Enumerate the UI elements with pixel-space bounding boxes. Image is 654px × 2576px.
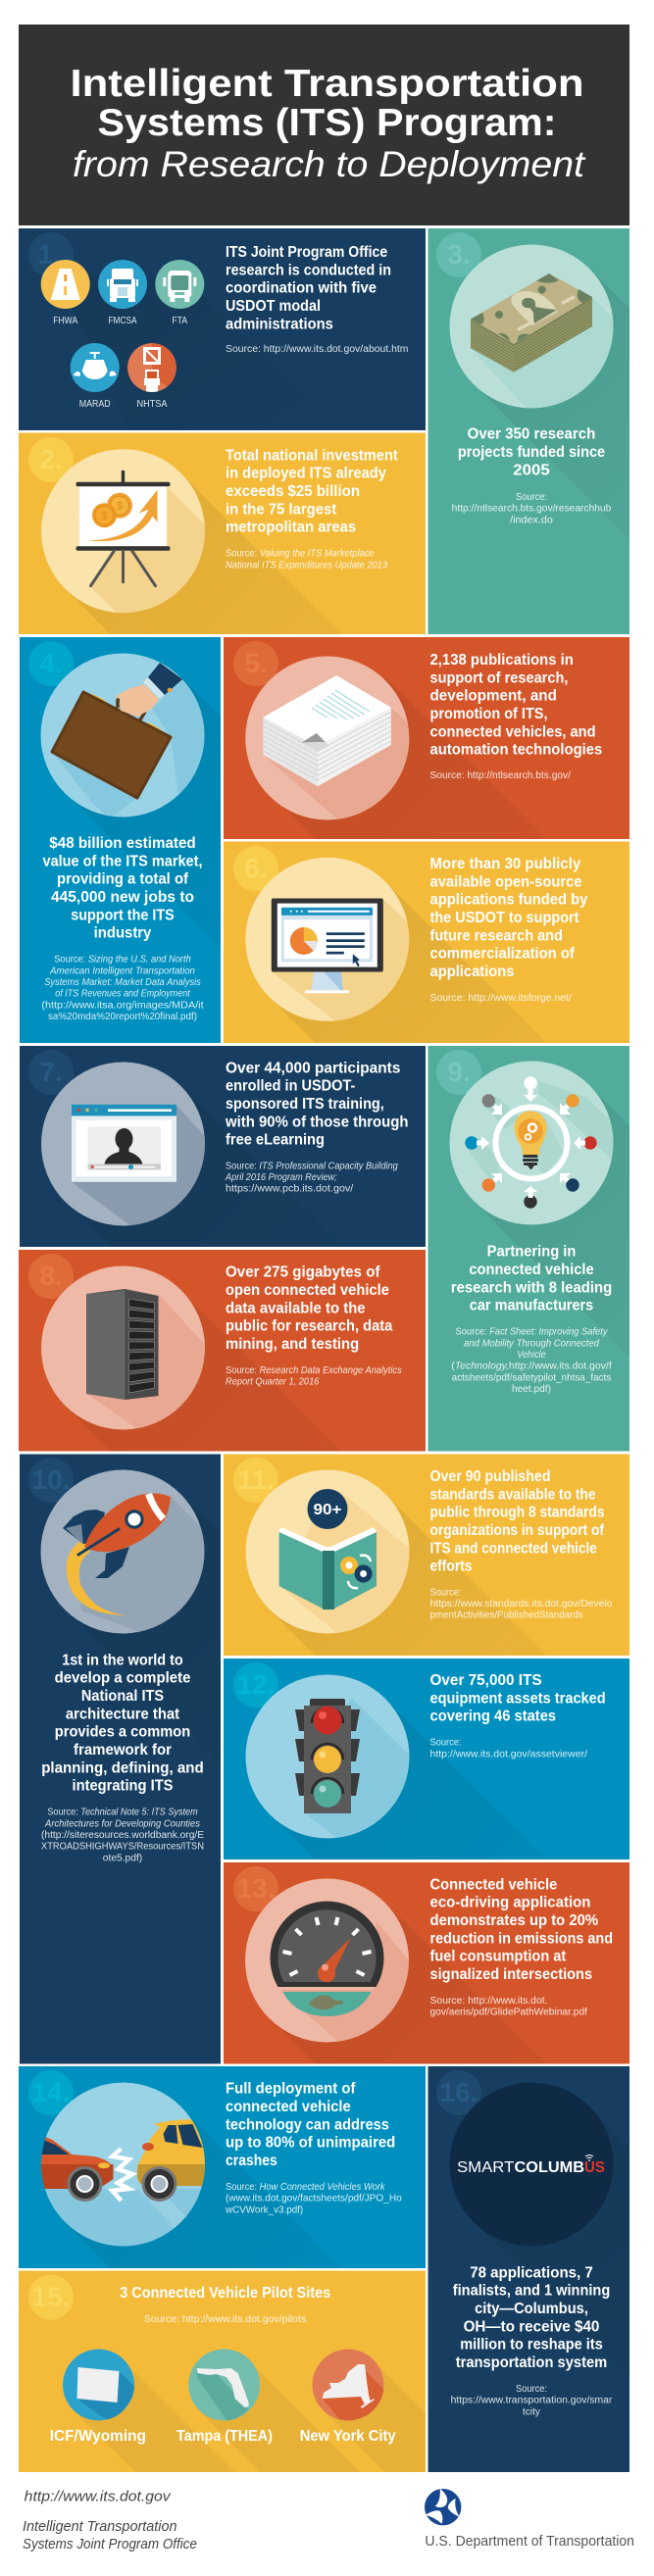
source 10 <box>41 1808 204 1863</box>
source 9: Vehicle <box>517 1350 546 1361</box>
source 15: Source: http://www.its.dot.gov/pilots <box>144 2314 306 2325</box>
heading 11: public through 8 standards <box>429 1505 605 1521</box>
heading 4: industry <box>94 925 151 941</box>
number badge 2: 2. <box>39 444 63 474</box>
number badge 7 <box>28 1050 74 1095</box>
heading 5: automation technologies <box>429 742 602 759</box>
heading 2: Total national investment <box>226 447 398 464</box>
number badge 5 <box>233 641 278 686</box>
source 14: Source: How Connected Vehicles Work <box>226 2182 386 2193</box>
panel 11: published standards <box>224 1455 629 1656</box>
heading 1 <box>226 244 391 332</box>
agency labels <box>53 315 187 410</box>
yellow car <box>137 2119 212 2186</box>
heading 10: integrating ITS <box>73 1778 174 1795</box>
number badge 9 <box>436 1050 481 1095</box>
heading 4: $48 billion estimated <box>49 835 196 852</box>
heading 2 <box>226 447 398 536</box>
source 10: Architectures for Developing Counties <box>44 1818 200 1829</box>
panel 12: equipment assets <box>224 1659 629 1859</box>
heading 13: demonstrates up to 20% <box>429 1912 598 1929</box>
heading 4: support the ITS <box>71 908 175 923</box>
heading 9 <box>451 1244 612 1314</box>
title: Systems (ITS) Program: <box>98 102 557 144</box>
source 4: American Intelligent Transportation <box>49 966 195 976</box>
site labels: Tampa (THEA) <box>176 2428 273 2445</box>
heading 6: More than 30 publicly <box>429 856 580 872</box>
source 8 <box>226 1365 402 1388</box>
source 14 <box>225 2182 402 2215</box>
source 7 <box>225 1161 398 1195</box>
heading 10: National ITS <box>81 1688 164 1705</box>
icon: Florida <box>188 2349 260 2424</box>
title: from Research to Deployment <box>73 144 586 184</box>
number badge 13 <box>233 1866 278 1911</box>
icon: Smart Columbus logo: COLUMB <box>514 2159 584 2176</box>
source 3: Source: <box>516 492 547 503</box>
source 10: Source: Technical Note 5: ITS System <box>47 1808 198 1818</box>
panel 8: open data <box>19 1250 426 1451</box>
heading 1: coordination with five <box>226 280 377 297</box>
icon: e-learning window <box>41 1063 205 1225</box>
panel 4: market value <box>20 637 221 1043</box>
source 10: (http://siteresources.worldbank.org/E <box>41 1830 204 1841</box>
source 2: Source: Valuing the ITS Marketplace <box>226 549 375 560</box>
number badge 3: 3. <box>447 239 471 270</box>
heading 11: standards available to the <box>429 1486 596 1503</box>
heading 10: planning, defining, and <box>41 1759 204 1776</box>
heading 14: up to 80% of unimpaired <box>226 2135 395 2152</box>
heading 7: Over 44,000 participants <box>226 1060 400 1076</box>
heading 6: applications funded by <box>429 892 587 909</box>
source 7: Source: ITS Professional Capacity Building <box>226 1161 398 1171</box>
heading 7: sponsored ITS training, <box>226 1096 384 1113</box>
source 2 <box>226 549 388 570</box>
heading 7: with 90% of those through <box>225 1114 408 1130</box>
footer: website and office: http://www.its.dot.gov <box>25 2489 172 2505</box>
site labels: New York City <box>300 2428 396 2445</box>
number badge 12 <box>233 1662 278 1708</box>
heading 9: Partnering in <box>487 1244 576 1261</box>
heading 6: future research and <box>429 927 563 944</box>
heading 12 <box>429 1672 606 1725</box>
source 11: pmentActivities/PublishedStandards <box>429 1610 583 1621</box>
heading 5: 2,138 publications in <box>429 652 574 669</box>
icon: presentation easel: $ <box>101 511 108 522</box>
panel 1: modal administrations <box>19 228 426 444</box>
icon: traffic light <box>245 1674 410 1839</box>
source 1: Source: http://www.its.dot.gov/about.htm <box>226 344 408 355</box>
heading 16: finalists, and 1 winning <box>453 2283 610 2300</box>
source 10: ote5.pdf) <box>103 1853 142 1863</box>
number badge 8 <box>28 1254 74 1299</box>
panel 3: research projects <box>428 228 629 634</box>
source 4: Source: Sizing the U.S. and North <box>54 955 191 966</box>
heading 4: value of the ITS market, <box>43 853 202 870</box>
panel 10: national architecture <box>20 1455 221 2064</box>
source 9 <box>451 1327 612 1395</box>
panel 9: car manufacturers <box>428 1046 629 1451</box>
icon: briefcase <box>41 653 211 818</box>
source 9: heet.pdf) <box>512 1384 551 1395</box>
heading 7 <box>225 1060 408 1149</box>
footer: website and office <box>23 2489 197 2552</box>
number badge 14 <box>28 2070 74 2115</box>
icon: car crash <box>41 2082 212 2248</box>
source 11: Source: <box>429 1587 461 1598</box>
source 4: Systems Market: Market Data Analysis <box>44 977 201 988</box>
heading 14: connected vehicle <box>226 2099 351 2115</box>
icon: speedometer <box>245 1878 409 2043</box>
heading 14 <box>226 2081 395 2169</box>
heading 16: OH—to receive $40 <box>464 2318 599 2335</box>
heading 11: organizations in support of <box>429 1522 605 1539</box>
number badge 6 <box>233 846 278 891</box>
source 4: of ITS Revenues and Employment <box>55 989 191 1000</box>
heading 14: Full deployment of <box>226 2081 356 2098</box>
icon: stack of papers <box>245 657 410 819</box>
number badge 15: 15. <box>32 2282 70 2311</box>
number badge 4 <box>28 641 74 686</box>
number badge 10 <box>28 1458 74 1503</box>
number badge 1: 1. <box>37 239 61 270</box>
heading 16: million to reshape its <box>460 2337 603 2353</box>
number badge 16 <box>436 2070 481 2115</box>
icon: New York <box>312 2349 387 2424</box>
source 11: https://www.standards.its.dot.gov/Develo <box>429 1599 613 1610</box>
heading 7: enrolled in USDOT- <box>226 1078 355 1095</box>
heading 12: Over 75,000 ITS <box>429 1672 542 1689</box>
heading 13 <box>429 1876 613 1983</box>
source 13: Source: http://www.its.dot. <box>429 1996 547 2006</box>
heading 15: 3 Connected Vehicle Pilot Sites <box>120 2285 330 2302</box>
source 16: https://www.transportation.gov/smar <box>451 2396 613 2406</box>
source 14: wCVWork_v3.pdf) <box>225 2204 303 2215</box>
heading 6: available open-source <box>429 873 582 890</box>
heading 10: architecture that <box>66 1706 180 1722</box>
source 7: https://www.pcb.its.dot.gov/ <box>226 1184 354 1195</box>
heading 8: open connected vehicle <box>226 1282 389 1299</box>
number badge 15 <box>28 2274 74 2319</box>
source 13 <box>429 1996 587 2018</box>
heading 9: car manufacturers <box>470 1298 593 1314</box>
heading 4: 445,000 new jobs to <box>51 889 194 906</box>
icon: standards book <box>245 1470 410 1633</box>
heading 16: city—Columbus, <box>475 2301 588 2317</box>
heading 16: 78 applications, 7 <box>470 2264 593 2281</box>
agency labels: FTA <box>173 315 187 326</box>
number badge 7: 7. <box>39 1057 63 1087</box>
panel 14: crash reduction <box>19 2066 426 2268</box>
number badge 11 <box>233 1458 278 1503</box>
heading 1: USDOT modal <box>226 298 321 315</box>
number badge 10: 10. <box>32 1464 70 1495</box>
panel 7: training <box>20 1046 426 1247</box>
heading 1: research is conducted in <box>226 262 391 278</box>
number badge 6: 6. <box>244 853 268 883</box>
heading 11: Over 90 published <box>429 1468 551 1485</box>
heading 13: reduction in emissions and <box>429 1930 613 1947</box>
heading 13: Connected vehicle <box>429 1876 557 1893</box>
panel 15: pilot sites <box>19 2270 426 2472</box>
number badge 13: 13. <box>237 1873 275 1904</box>
heading 2: exceeds $25 billion <box>226 483 360 500</box>
source 16 <box>451 2384 613 2417</box>
heading 6: applications <box>429 964 515 980</box>
source 12: Source: <box>429 1738 461 1749</box>
icon: Smart Columbus logo: SMART <box>457 2159 515 2176</box>
source 3: http://ntlsearch.bts.gov/researchhub <box>452 504 612 515</box>
source 14: (www.its.dot.gov/factsheets/pdf/JPO_Ho <box>226 2194 402 2204</box>
number badge 1 <box>28 232 74 277</box>
number badge 8: 8. <box>39 1261 63 1291</box>
footer: website and office: Intelligent Transportation <box>23 2518 176 2535</box>
heading 2: metropolitan areas <box>226 520 356 536</box>
number badge 3 <box>436 232 481 277</box>
number badge 9: 9. <box>447 1057 471 1087</box>
heading 2: in deployed ITS already <box>226 466 386 482</box>
heading 2: in the 75 largest <box>226 501 337 518</box>
heading 1: ITS Joint Program Office <box>226 244 387 261</box>
heading 13: eco-driving application <box>429 1895 590 1911</box>
source 16: tcity <box>523 2406 540 2417</box>
source 8: Source: Research Data Exchange Analytics <box>226 1365 402 1376</box>
heading 6 <box>429 856 587 980</box>
icon: server rack <box>41 1266 205 1429</box>
heading 10: provides a common <box>55 1724 190 1741</box>
heading 7: free eLearning <box>226 1132 325 1149</box>
source 5: Source: http://ntlsearch.bts.gov/ <box>429 770 571 781</box>
heading 14: technology can address <box>226 2116 389 2133</box>
icon: stack of money <box>449 245 614 408</box>
footer: website and office: Systems Joint Program Office <box>23 2536 197 2552</box>
heading 16 <box>453 2264 610 2371</box>
source 4: sa%20mda%20report%20final.pdf) <box>48 1012 197 1022</box>
exhaust <box>67 1539 127 1615</box>
agency labels: MARAD <box>79 398 111 410</box>
number badge 14: 14. <box>32 2077 70 2107</box>
number badge 5: 5. <box>244 648 268 678</box>
heading 3 <box>458 425 605 478</box>
icon: standards book: 90+ <box>313 1502 342 1518</box>
heading 13: signalized intersections <box>429 1966 592 1983</box>
heading 8: Over 275 gigabytes of <box>226 1264 380 1281</box>
heading 5: development, and <box>429 688 557 705</box>
source 13: gov/aeris/pdf/GlidePathWebinar.pdf <box>429 2007 587 2018</box>
icon: Smart Columbus logo <box>449 2082 614 2247</box>
arrows <box>477 1088 585 1198</box>
number badge 2 <box>28 437 74 482</box>
heading 11: efforts <box>429 1559 473 1575</box>
heading 5: support of research, <box>429 669 568 686</box>
heading 11 <box>429 1468 605 1575</box>
heading 4 <box>43 835 202 941</box>
heading 6: the USDOT to support <box>429 910 579 926</box>
heading 3: 2005 <box>513 462 550 478</box>
source 9: (Technology, http://www.its.dot.gov/f <box>451 1362 612 1372</box>
red car <box>41 2135 114 2189</box>
source 11 <box>429 1587 613 1621</box>
heading 8: public for research, data <box>226 1318 392 1335</box>
agency labels: FHWA <box>53 315 77 326</box>
icon: Wyoming <box>63 2349 137 2424</box>
heading 16: transportation system <box>456 2354 607 2371</box>
heading 9: connected vehicle <box>469 1262 594 1278</box>
heading 10: 1st in the world to <box>62 1652 183 1668</box>
title: Intelligent Transportation <box>71 63 584 105</box>
heading 5: connected vehicles, and <box>429 723 596 740</box>
icon: FHWA road <box>41 260 90 309</box>
site labels: ICF/Wyoming <box>50 2428 146 2445</box>
number badge 4: 4. <box>39 648 63 678</box>
icon: rocket <box>41 1470 206 1640</box>
heading 5: promotion of ITS, <box>429 706 547 722</box>
panel 16: Smart Columbus <box>428 2066 654 2516</box>
source 9: actsheets/pdf/safetypilot_nhtsa_facts <box>452 1372 611 1383</box>
number badge 12: 12. <box>237 1669 275 1700</box>
icon: computer monitor <box>245 857 410 1021</box>
heading 1: administrations <box>226 316 333 332</box>
source 6: Source: http://www.itsforge.net/ <box>429 993 572 1004</box>
panel 13: eco-driving <box>224 1862 629 2064</box>
heading 14: crashes <box>226 2153 277 2169</box>
site labels <box>50 2428 396 2445</box>
source 3 <box>452 492 612 525</box>
partner dots <box>465 1076 597 1209</box>
icon: MARAD ship <box>71 343 120 392</box>
source 12 <box>429 1738 587 1759</box>
panel 5: publications <box>224 637 629 839</box>
title <box>19 25 629 225</box>
agency labels: NHTSA <box>137 398 167 410</box>
source 7: April 2016 Program Review; <box>225 1172 337 1183</box>
icon: presentation easel: $ <box>117 501 123 513</box>
source 10: XTROADSHIGHWAYS/Resources/ITSN <box>41 1842 204 1853</box>
heading 3: projects funded since <box>458 444 605 461</box>
number badge 16: 16. <box>440 2077 478 2107</box>
icon: FTA bus <box>155 260 204 309</box>
agency labels: FMCSA <box>108 315 137 326</box>
icon: Smart Columbus logo: US <box>584 2159 605 2176</box>
heading 10: develop a complete <box>55 1670 190 1687</box>
heading 13: fuel consumption at <box>429 1949 567 1965</box>
icon: FMCSA truck <box>98 260 147 309</box>
icon: light bulb with partners <box>449 1061 615 1225</box>
number badge 11: 11. <box>237 1464 275 1495</box>
footer: DOT logo <box>425 2489 461 2525</box>
icon: NHTSA seat belt <box>127 343 176 392</box>
heading 8: mining, and testing <box>226 1336 359 1353</box>
heading 10 <box>41 1652 204 1795</box>
source 9: and Mobility Through Connected <box>464 1338 599 1349</box>
footer: department name: U.S. Department of Transportation <box>425 2533 634 2550</box>
heading 8 <box>226 1264 392 1353</box>
source 16: Source: <box>516 2384 547 2395</box>
heading 5 <box>429 652 602 759</box>
heading 8: data available to the <box>226 1300 366 1316</box>
panel 6: open-source applications <box>224 841 629 1043</box>
source 12: http://www.its.dot.gov/assetviewer/ <box>429 1749 587 1759</box>
panel 2: national investment <box>19 433 426 634</box>
heading 12: covering 46 states <box>429 1709 556 1725</box>
source 2: National ITS Expenditures Update 2013 <box>226 560 388 570</box>
source 4: (http://www.itsa.org/images/MDA/it <box>41 1000 204 1011</box>
heading 6: commercialization of <box>429 946 575 963</box>
source 3: /index.do <box>510 515 554 525</box>
icon: presentation easel <box>41 449 205 614</box>
heading 4: providing a total of <box>57 871 189 888</box>
heading 9: research with 8 leading <box>451 1279 612 1296</box>
source 9: Source: Fact Sheet: Improving Safety <box>455 1327 609 1338</box>
source 8: Report Quarter 1, 2016 <box>226 1377 320 1388</box>
heading 10: framework for <box>74 1742 172 1759</box>
heading 12: equipment assets tracked <box>429 1690 606 1707</box>
source 4 <box>41 955 204 1022</box>
heading 3: Over 350 research <box>468 425 595 443</box>
heading 11: ITS and connected vehicle <box>429 1540 597 1557</box>
